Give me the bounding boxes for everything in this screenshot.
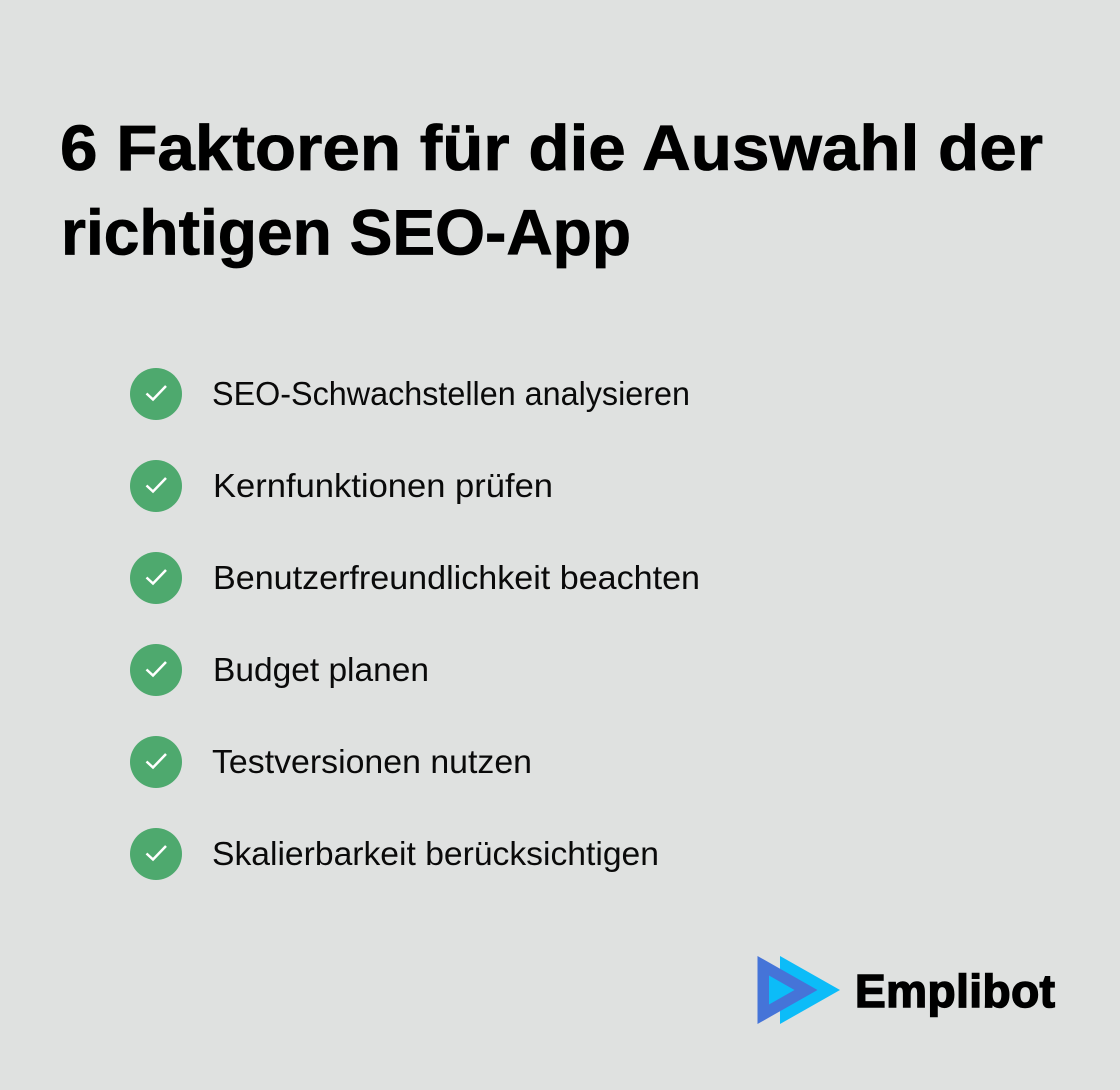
logo wordmark: Emplibot <box>855 965 1055 1017</box>
item 2: Kernfunktionen prüfen: Kernfunktionen prüfen <box>213 467 553 504</box>
item 4: Budget planen: Budget planen <box>213 651 429 688</box>
title: richtigen SEO-App <box>61 196 631 268</box>
item 5: Testversionen nutzen <box>130 736 532 788</box>
item 6: Skalierbarkeit berücksichtigen <box>130 828 659 880</box>
item 4: Budget planen <box>130 644 429 696</box>
title <box>60 112 1043 268</box>
item 1: SEO-Schwachstellen analysieren: SEO-Schwachstellen analysieren <box>212 375 690 412</box>
item 5: Testversionen nutzen: Testversionen nutzen <box>212 743 532 780</box>
title: 6 Faktoren für die Auswahl der <box>60 112 1043 184</box>
item 3: Benutzerfreundlichkeit beachten <box>130 552 700 604</box>
logo: Emplibot <box>758 956 1055 1024</box>
item 3: Benutzerfreundlichkeit beachten: Benutzerfreundlichkeit beachten <box>213 559 700 596</box>
checklist <box>130 368 700 880</box>
icon: play triangles <box>758 956 840 1024</box>
item 2: Kernfunktionen prüfen <box>130 460 553 512</box>
item 6: Skalierbarkeit berücksichtigen: Skalierbarkeit berücksichtigen <box>212 835 659 872</box>
item 1: SEO-Schwachstellen analysieren <box>130 368 690 420</box>
